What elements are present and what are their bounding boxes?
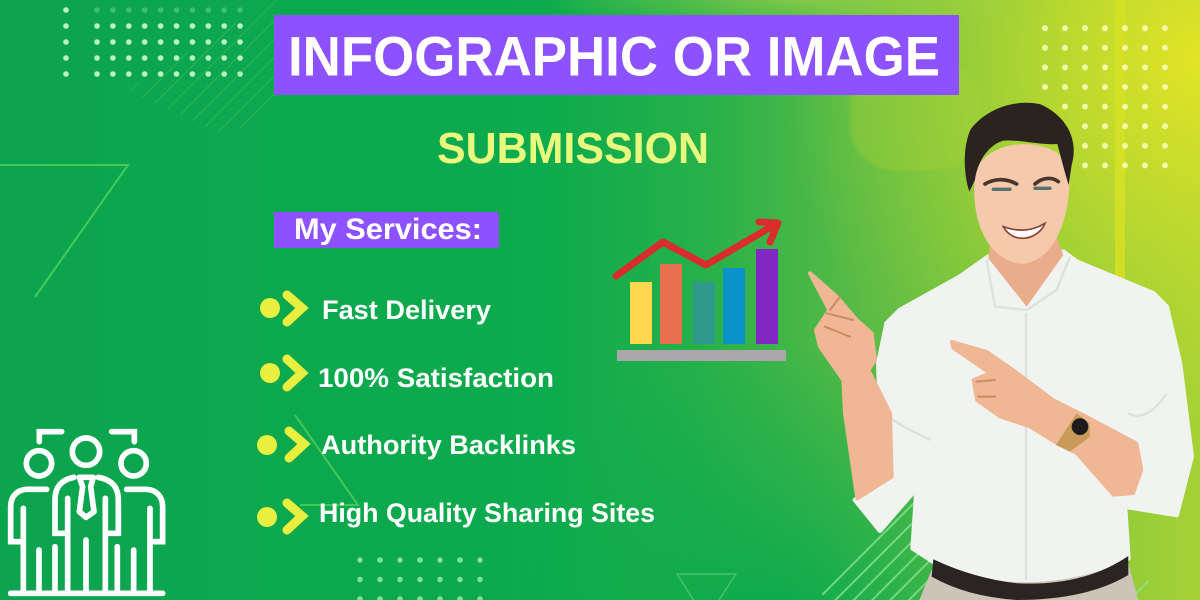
trousers: [919, 563, 1138, 600]
bar chart icon: [616, 222, 786, 361]
eyes and brows: [985, 178, 1058, 184]
decorative hatch: top left: [127, 0, 280, 137]
man pointing: [810, 103, 1192, 600]
item: satisfaction: [260, 359, 554, 393]
decorative triangle: centre: [295, 415, 358, 505]
decorative triangle: left: [0, 165, 128, 297]
decorative hatch: right of figure: [1125, 570, 1150, 600]
title banner: INFOGRAPHIC OR IMAGE: [288, 24, 940, 88]
services heading: My Services:: [294, 213, 482, 246]
bars: [630, 249, 778, 344]
service list: [257, 295, 655, 530]
shirt shadows: [880, 257, 1167, 580]
right hand and forearm: [952, 342, 1142, 495]
wristwatch: [1056, 413, 1090, 452]
item: authority backlinks: Authority Backlinks: [321, 430, 576, 460]
trend arrow: [616, 222, 778, 276]
right hand finger creases: [977, 380, 995, 397]
neck: [988, 237, 1063, 307]
subtitle: SUBMISSION: [437, 124, 709, 173]
decorative triangle: bottom: [677, 574, 736, 600]
smile: [1003, 223, 1045, 238]
item: high quality sharing sites: High Quality Sharing Sites: [319, 498, 655, 528]
face: [974, 144, 1070, 264]
belt: [932, 556, 1128, 600]
team icon: [11, 432, 163, 593]
shirt: [855, 252, 1192, 580]
hair: [965, 103, 1074, 192]
item: fast delivery: Fast Delivery: [322, 295, 491, 325]
left hand and forearm: [810, 273, 892, 498]
item: satisfaction: 100% Satisfaction: [318, 363, 554, 393]
decorative dot grid: bottom: [350, 550, 490, 600]
decorative hatch: bottom right: [815, 480, 935, 600]
decorative dot grid: top right: [1035, 18, 1175, 172]
left hand finger creases: [825, 297, 853, 337]
chart base: [617, 350, 786, 361]
decorative dot grid: top left: [63, 7, 248, 82]
